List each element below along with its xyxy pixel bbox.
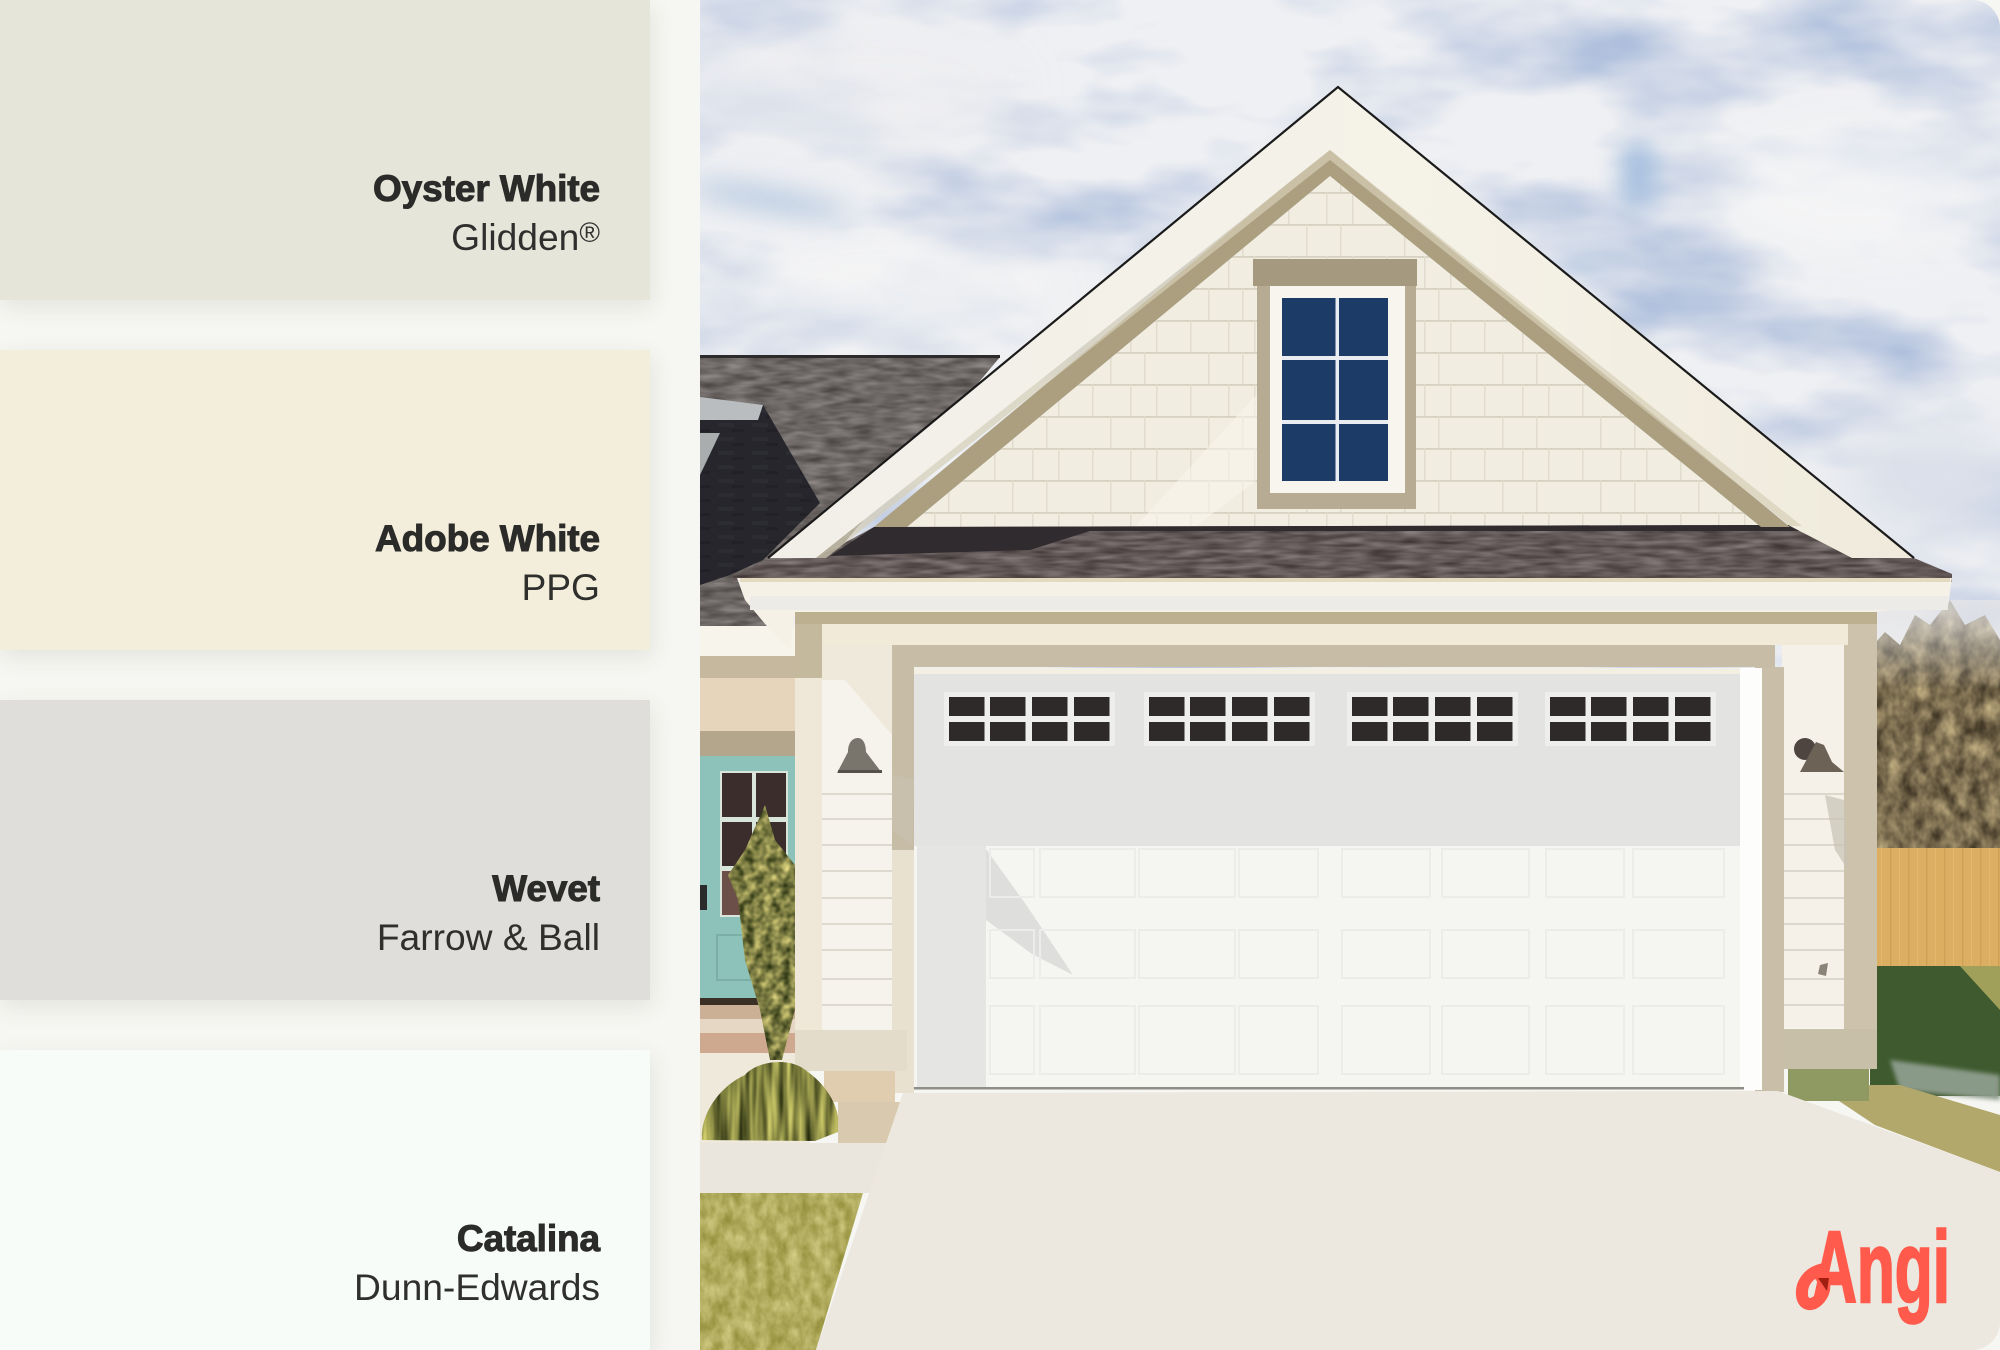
panel: Adobe White swatch <box>0 350 650 650</box>
garage door <box>914 668 1744 1090</box>
shrub by the door <box>728 805 795 1060</box>
label: Adobe White, PPG: PPG <box>521 566 600 608</box>
window casing <box>1253 259 1417 509</box>
panel: Oyster White swatch <box>0 0 650 300</box>
right siding <box>1782 624 1848 1028</box>
left porch: grey roof <box>700 355 1000 640</box>
label: Catalina, Dunn-Edwards <box>354 1218 601 1308</box>
gable siding <box>907 176 1761 527</box>
window glass <box>1282 298 1388 481</box>
lower brown shingle roof <box>733 525 1952 582</box>
roof shadow <box>700 405 820 585</box>
left pillar <box>795 612 822 1034</box>
ornamental grass clump <box>702 1062 839 1141</box>
concrete driveway <box>816 1091 2000 1350</box>
sky with clouds <box>700 0 2000 668</box>
rake inner edge shading <box>816 150 1802 558</box>
background trees <box>1876 600 2000 848</box>
hose spigot <box>1818 963 1828 976</box>
upper gable <box>733 87 1952 582</box>
panel: Catalina swatch <box>0 1050 650 1350</box>
left brick foot <box>824 1071 895 1102</box>
right wall base <box>1784 1029 1877 1069</box>
header band <box>892 624 1848 645</box>
door shadow top <box>914 668 1740 846</box>
label: Wevet, Farrow & Ball: Farrow & Ball <box>377 916 600 958</box>
door window 4 <box>1545 692 1716 746</box>
porch wall and teal door <box>700 626 810 1143</box>
icon: left wall lamp <box>837 738 882 773</box>
left siding <box>822 622 894 1030</box>
small porch gable trim <box>700 397 763 475</box>
wooden fence <box>1876 848 2000 966</box>
green foot <box>1788 1069 1869 1101</box>
label: Adobe White, PPG: Adobe White <box>375 518 600 559</box>
label: Catalina, Dunn-Edwards: Dunn-Edwards <box>354 1266 600 1308</box>
panel: Wevet swatch <box>0 700 650 1000</box>
black roof edge <box>768 87 1914 558</box>
label: Oyster White, Glidden: Oyster White <box>373 168 600 209</box>
left wall base <box>795 1030 892 1071</box>
white rake boards <box>768 87 1914 558</box>
icon: right wall lamp <box>1794 738 1844 864</box>
label: Wevet, Farrow & Ball: Wevet <box>492 868 600 909</box>
front walkway <box>700 1102 905 1193</box>
front garage wall <box>795 612 1877 1102</box>
right door jamb <box>1775 667 1784 1092</box>
tan trim under fascia <box>795 612 1877 624</box>
photo illustration: house with garage door <box>700 0 2000 1350</box>
door window 3 <box>1347 692 1518 746</box>
door window 2 <box>1144 692 1315 746</box>
garage tan frame <box>892 645 1775 1093</box>
gable light patch <box>1135 380 1270 527</box>
gutter fascia <box>737 578 1952 650</box>
shaded lawn <box>1839 966 2000 1172</box>
front lawn <box>700 1193 863 1350</box>
label: Adobe White, PPG <box>375 518 600 608</box>
label: Oyster White, Glidden: Glidden® <box>451 216 600 258</box>
label: Wevet, Farrow & Ball <box>377 868 600 958</box>
shadow on lower roof <box>830 525 1800 556</box>
diagonal shadow <box>986 849 1073 975</box>
lower left jamb highlight <box>892 850 914 1093</box>
door panels <box>990 849 1724 1074</box>
door window 1 <box>944 692 1115 746</box>
label: Oyster White, Glidden <box>373 168 600 258</box>
logo: Angi <box>1802 1212 1950 1324</box>
label: Catalina, Dunn-Edwards: Catalina <box>457 1218 600 1259</box>
right tan pillar <box>1844 614 1877 1030</box>
tan gable band <box>874 148 1790 527</box>
